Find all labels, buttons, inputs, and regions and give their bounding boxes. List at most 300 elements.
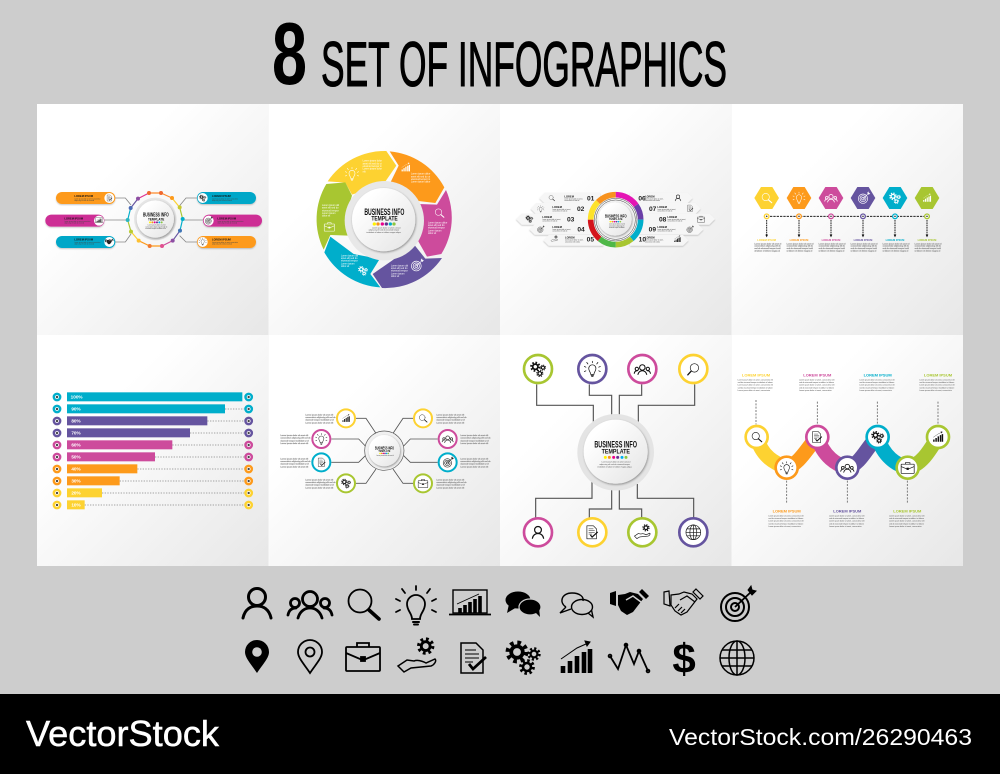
node briefcase: consectetur adipiscing elit sed do	[436, 481, 467, 484]
segment icons and text: eiusmod tempor	[428, 227, 445, 230]
footer logo: VectorStock	[26, 713, 220, 754]
left row 03: Lorem ipsum dolor sit amet,	[542, 218, 561, 221]
label top 1: Lorem ipsum dolor sit amet, consectetur elit	[738, 384, 774, 387]
step 3: Lorem ipsum dolor sit amet el	[819, 242, 846, 245]
step 4: ut labore et dolore magna al	[851, 249, 877, 252]
left row 04: LOREM	[552, 225, 563, 229]
left row 01: consectetur elit sed do	[564, 199, 579, 202]
label top 3: sed do eiusmod tempor incididunt ut labore	[859, 381, 894, 384]
icon: growth bars	[561, 641, 590, 673]
right row 08: Lorem ipsum dolor sit amet,	[667, 218, 686, 221]
bar 30%	[67, 476, 120, 485]
teal pill bottom left: adipiscing elit sed do eiusmod	[74, 243, 94, 246]
node search: eiusmod tempor incididunt ut el	[436, 419, 465, 422]
right row 10: LOREM	[645, 236, 655, 240]
node group	[628, 355, 656, 383]
left row 03: consectetur elit sed do	[542, 220, 557, 223]
node gears: eiusmod tempor incididunt ut el	[305, 484, 334, 487]
node search	[679, 355, 707, 383]
orange pill top left: adipiscing elit sed do eiusmod	[74, 199, 94, 202]
segment icons and text: Lorem ipsum dolor	[363, 160, 382, 163]
label bottom 3: Lorem ipsum dolor sit amet, consectetur	[889, 525, 922, 528]
orange pill bottom right: Lorem ipsum dolor sit amet consectetur	[212, 241, 238, 244]
right row 10: 10	[639, 237, 646, 244]
label top 4: LOREM IPSUM	[924, 373, 953, 378]
connectors	[536, 384, 695, 518]
label top 2	[799, 373, 835, 392]
icon: briefcase	[346, 643, 380, 671]
segment icons and text: dolor sit	[341, 265, 350, 268]
label bottom 1: Lorem ipsum dolor sit amet, consectetur elit	[768, 520, 804, 523]
node bulb: Lorem ipsum dolor sit amet elit	[280, 434, 309, 437]
right row 08: consectetur elit sed do	[667, 220, 682, 223]
bar 90%: 90%	[71, 407, 82, 412]
step 2: consectetur adipiscing elit do	[787, 245, 814, 248]
multicolour ring	[590, 194, 641, 245]
left row 04: Lorem ipsum dolor sit amet,	[552, 228, 571, 231]
left row 04: consectetur elit sed do	[552, 230, 567, 233]
right row 06: Lorem ipsum dolor sit amet,	[645, 197, 664, 200]
label bottom 3: Lorem ipsum dolor sit amet, consectetur elit	[889, 520, 925, 523]
node briefcase: Lorem ipsum dolor sit amet elit	[436, 486, 465, 489]
step 4: consectetur adipiscing elit do	[851, 245, 878, 248]
center disc: BUSINESS INFO	[605, 213, 627, 219]
right row 10	[630, 235, 688, 246]
label top 4: sed do eiusmod tempor incididunt ut labore	[919, 381, 954, 384]
panel background	[37, 104, 268, 335]
label bottom 1: Lorem ipsum dolor sit amet, consectetur	[768, 525, 801, 528]
label top 4: Lorem ipsum dolor sit amet, consectetur elit	[919, 378, 955, 381]
magenta pill left: adipiscing elit sed do eiusmod	[64, 222, 84, 225]
center disc: eiusmod tempor incididunt ut la	[145, 227, 166, 230]
label top 4: Lorem ipsum dolor sit amet, consectetur	[919, 389, 952, 392]
left row 05	[543, 235, 603, 246]
icon: solid handshake	[610, 589, 649, 615]
label bottom 3: Lorem ipsum dolor sit amet, consectetur elit	[889, 514, 925, 517]
left row 05: Lorem ipsum dolor sit amet,	[565, 239, 584, 242]
node target: Lorem ipsum dolor sit amet elit	[460, 465, 489, 468]
panel: percentage bar chart	[37, 335, 268, 566]
center disc: adipiscing elit sed do eiusmod tempor	[369, 229, 400, 232]
hub: adipiscing elit sed do eiusmod tempor	[599, 463, 630, 466]
segment icons and text: Lorem ipsum dol	[341, 254, 359, 257]
node briefcase	[414, 474, 467, 492]
step 1: Lorem ipsum dolor sit amet el	[754, 242, 782, 245]
left row 04: 04	[577, 227, 585, 234]
icon: hand with gear	[398, 639, 436, 672]
icon: light bulb	[396, 586, 436, 624]
node hand with gear	[628, 518, 656, 546]
node document: Lorem ipsum dolor sit amet elit	[280, 457, 309, 460]
left row 05: 05	[587, 237, 594, 244]
node search: Lorem ipsum dolor sit amet elit	[436, 413, 465, 416]
icon: user	[243, 588, 271, 618]
step 5: LOREM IPSUM	[886, 238, 905, 242]
node group: eiusmod tempor incididunt ut el	[460, 439, 489, 442]
step 2: LOREM IPSUM	[790, 238, 809, 242]
segment icons and text: Lorem ipsum	[322, 212, 336, 215]
center disc: consectetur adipiscing elit	[609, 224, 625, 227]
left row 01: 01	[587, 196, 595, 203]
step 2	[787, 187, 814, 252]
right row 06	[630, 193, 693, 203]
label bottom 1: Lorem ipsum dolor sit amet, consectetur elit	[768, 514, 804, 517]
timeline dashed line	[767, 215, 927, 218]
magenta pill right	[203, 215, 262, 227]
label top 3: Lorem ipsum dolor sit amet, consectetur elit	[859, 378, 895, 381]
left row 01: Lorem ipsum dolor sit amet,	[564, 197, 583, 200]
hub: Lorem ipsum dolor sit amet el	[376, 454, 394, 457]
node search	[414, 409, 467, 427]
bar 10%: 10%	[71, 503, 82, 508]
step 6: consectetur adipiscing elit do	[915, 245, 942, 248]
bar 40%: 40%	[71, 467, 82, 472]
step 6: LOREM IPSUM	[918, 238, 937, 242]
right row 09: 09	[649, 227, 656, 234]
label bottom 3: sed do eiusmod tempor incididunt ut labore	[889, 517, 924, 520]
magenta pill left: Lorem ipsum dolor sit amet consectetur	[64, 220, 91, 223]
node gears	[524, 355, 552, 383]
segment icons and text: dolor sit	[322, 215, 331, 218]
label top 2: Lorem ipsum dolor sit amet, consectetur	[799, 389, 832, 392]
segment icons and text: Lorem ipsum	[391, 272, 405, 275]
label bottom 3	[889, 509, 925, 528]
center disc: TEMPLATE	[609, 217, 623, 221]
panel background	[500, 104, 731, 335]
node bulb: consectetur adipiscing elit sed do	[280, 437, 311, 440]
bar 60%: 60%	[71, 443, 82, 448]
node chart: Lorem ipsum dolor sit amet elit	[305, 421, 334, 424]
node target: eiusmod tempor incididunt ut el	[460, 463, 489, 466]
panel background	[731, 335, 963, 566]
orange pill bottom right: adipiscing elit sed do eiusmod	[212, 243, 232, 246]
step 3: ut labore et dolore magna al	[819, 249, 845, 252]
icon: globe	[720, 641, 754, 675]
bar 90%	[67, 404, 225, 413]
panel: ten step hexagon ring	[500, 104, 731, 335]
node search	[746, 426, 768, 448]
node document: eiusmod tempor incididunt ut el	[280, 463, 309, 466]
icon: target	[721, 586, 756, 621]
panel background	[500, 335, 731, 566]
icon: solid chat	[506, 592, 541, 617]
step 6: sed do eiusmod tempor incid	[915, 247, 941, 250]
hub: BUSINESS INFO	[594, 440, 637, 450]
right row 06: consectetur elit sed do	[645, 199, 660, 202]
node user	[524, 518, 552, 546]
step 1: consectetur adipiscing elit do	[754, 245, 781, 248]
node target	[439, 453, 491, 471]
label top 1: Lorem ipsum dolor sit amet, consectetur	[738, 389, 771, 392]
label bottom 2: Lorem ipsum dolor sit amet, consectetur	[829, 525, 862, 528]
bar 70%: 70%	[71, 431, 82, 436]
node document: consectetur adipiscing elit sed do	[280, 460, 311, 463]
panel: hexagon timeline	[731, 104, 963, 335]
orange pill top left	[56, 192, 115, 204]
node chart: Lorem ipsum dolor sit amet elit	[305, 413, 334, 416]
label bottom 2: LOREM IPSUM	[833, 509, 862, 514]
step 4: Lorem ipsum dolor sit amet el	[851, 242, 878, 245]
left row 01	[539, 193, 600, 203]
node target: Lorem ipsum dolor sit amet elit	[460, 457, 489, 460]
right row 08: LOREM	[667, 215, 678, 219]
label top 2: Lorem ipsum dolor sit amet, consectetur elit	[799, 378, 835, 381]
step 2: sed do eiusmod tempor incid	[787, 247, 813, 250]
node search: consectetur adipiscing elit sed do	[436, 416, 467, 419]
node search: Lorem ipsum dolor sit amet elit	[436, 421, 465, 424]
label bottom 2: Lorem ipsum dolor sit amet, consectetur elit	[829, 520, 865, 523]
node bulb	[280, 430, 330, 448]
icon: document check	[461, 643, 486, 673]
node gears: consectetur adipiscing elit sed do	[305, 481, 336, 484]
right row 09: LOREM	[657, 225, 668, 229]
teal pill bottom left: Lorem ipsum dolor sit amet consectetur	[74, 241, 101, 244]
step 2: ut labore et dolore magna al	[787, 249, 813, 252]
step 1: ut labore et dolore magna al	[754, 249, 780, 252]
label top 2: sed do eiusmod tempor incididunt ut labore	[799, 381, 834, 384]
label top 2: sed do eiusmod tempor incididunt ut labore	[799, 386, 834, 389]
panel: wave timeline	[731, 335, 963, 566]
panel background	[268, 335, 500, 566]
segment icons and text: Lorem ipsum dol	[322, 204, 340, 207]
label top 4: Lorem ipsum dolor sit amet, consectetur elit	[919, 384, 955, 387]
segment icons and text	[322, 160, 448, 278]
magenta pill left	[45, 215, 104, 227]
panel background	[731, 104, 963, 335]
right row 06: LOREM	[645, 194, 655, 198]
panel: circular timeline with pills	[37, 104, 268, 335]
bar 20%: 20%	[71, 491, 82, 496]
right row 09: consectetur elit sed do	[657, 230, 672, 233]
label bottom 1: LOREM IPSUM	[773, 509, 801, 514]
icon: solid pin	[245, 640, 269, 673]
connectors	[331, 418, 438, 483]
label top 2: Lorem ipsum dolor sit amet, consectetur elit	[799, 384, 835, 387]
teal pill top right: adipiscing elit sed do eiusmod	[212, 199, 232, 202]
node group: consectetur adipiscing elit sed do	[460, 437, 491, 440]
icon: outline pin	[298, 640, 322, 673]
segment icons and text: Lorem ipsum dolor	[428, 221, 448, 224]
center disc: incididunt ut labore et dolore magna aliqua	[366, 231, 402, 234]
center disc: TEMPLATE	[371, 217, 398, 223]
right row 07: consectetur elit sed do	[657, 210, 672, 213]
segment icons and text: eiusmod tempor in	[363, 165, 383, 168]
node document	[280, 453, 330, 471]
step 3	[819, 187, 846, 252]
step 6: ut labore et dolore magna al	[915, 249, 941, 252]
icon: dollar: $	[672, 635, 696, 682]
bar 100%: 100%	[71, 395, 83, 400]
step 3: LOREM IPSUM	[822, 238, 841, 242]
segment icons and text: amet elit sed do	[341, 257, 358, 260]
node globe	[679, 518, 707, 546]
label bottom 1: sed do eiusmod tempor incididunt ut labore	[768, 517, 803, 520]
magenta pill right: Lorem ipsum dolor sit amet consectetur	[217, 220, 244, 223]
icon: search	[348, 590, 379, 619]
step 1: LOREM IPSUM	[757, 238, 777, 242]
magenta pill left: LOREM IPSUM	[64, 217, 84, 221]
label bottom 1: sed do eiusmod tempor incididunt ut labore	[768, 522, 803, 525]
right row 06: 06	[638, 196, 646, 203]
center disc	[594, 198, 637, 241]
label bottom 2: sed do eiusmod tempor incididunt ut labore	[829, 517, 864, 520]
segment icons and text: dolor sit	[391, 275, 400, 278]
hub: BUSINESS INFO	[375, 446, 394, 451]
node document: Lorem ipsum dolor sit amet elit	[280, 465, 309, 468]
center disc: Lorem ipsum dolor sit amet	[148, 224, 166, 227]
teal pill bottom left: LOREM IPSUM	[74, 238, 94, 242]
step 4	[851, 187, 878, 252]
center disc: Lorem ipsum dolor sit amet	[609, 223, 626, 226]
icon: outline handshake	[664, 589, 703, 615]
left row 04	[529, 224, 597, 235]
label bottom 2: sed do eiusmod tempor incididunt ut labore	[829, 522, 864, 525]
segment icons and text: eiusmod tempor	[322, 209, 339, 212]
label bottom 3: sed do eiusmod tempor incididunt ut labore	[889, 522, 924, 525]
left row 03	[516, 214, 593, 225]
magenta pill right: LOREM IPSUM	[217, 217, 237, 221]
hub: TEMPLATE	[378, 450, 391, 453]
left row 02: LOREM	[552, 205, 563, 209]
step 4: LOREM IPSUM	[854, 238, 873, 242]
step 5: sed do eiusmod tempor incid	[883, 247, 909, 250]
magenta pill right: adipiscing elit sed do eiusmod	[217, 222, 237, 225]
teal pill top right: LOREM IPSUM	[212, 194, 232, 198]
node briefcase	[897, 457, 919, 479]
node group: Lorem ipsum dolor sit amet elit	[460, 442, 489, 445]
segment icons and text: Lorem ipsum dolor	[411, 173, 431, 176]
teal pill bottom left	[56, 236, 115, 248]
label top 2: LOREM IPSUM	[803, 373, 832, 378]
footer bar	[0, 694, 1000, 774]
orange pill bottom right	[197, 236, 256, 248]
node gears	[305, 474, 355, 492]
label bottom 2	[829, 509, 865, 528]
node gears: Lorem ipsum dolor sit amet elit	[305, 486, 334, 489]
segment icons and text: eiusmod tempor	[341, 260, 358, 263]
step 6	[915, 187, 942, 252]
bar 10%	[67, 500, 85, 509]
dotted guides	[85, 409, 244, 505]
icon: zigzag line	[609, 644, 649, 672]
segment icons and text: eiusmod tempor	[391, 270, 408, 273]
icon: outline chat	[560, 593, 593, 617]
segment green	[317, 182, 352, 250]
node chart	[927, 426, 949, 448]
left row 03: LOREM	[542, 215, 553, 219]
bar 40%	[67, 464, 137, 473]
dashed leaders	[756, 400, 938, 503]
panel background	[37, 335, 268, 566]
segment orange	[390, 151, 444, 203]
node briefcase: eiusmod tempor incididunt ut el	[436, 484, 465, 487]
node bulb: Lorem ipsum dolor sit amet elit	[280, 442, 309, 445]
segment icons and text: Lorem ipsum dol	[391, 264, 409, 267]
bar 50%	[67, 452, 155, 461]
right row 07	[637, 203, 701, 214]
title numeral: 8	[272, 4, 307, 103]
right row 09	[637, 224, 703, 235]
right row 10: Lorem ipsum dolor sit amet,	[645, 239, 664, 242]
segment magenta	[417, 190, 452, 257]
label bottom 3: LOREM IPSUM	[893, 509, 922, 514]
hub: TEMPLATE	[602, 450, 630, 456]
step 2: Lorem ipsum dolor sit amet el	[787, 242, 814, 245]
left row 02: Lorem ipsum dolor sit amet,	[552, 208, 571, 211]
right row 08	[638, 214, 715, 225]
segment teal	[324, 237, 380, 287]
node document	[578, 518, 606, 546]
segment icons and text: amet elit sed do	[428, 224, 445, 227]
left row 02: 02	[577, 206, 585, 213]
center disc	[345, 181, 424, 260]
label bottom 1	[768, 509, 804, 528]
wave band	[757, 437, 938, 468]
node gears	[867, 426, 889, 448]
segment yellow	[328, 151, 396, 195]
node briefcase: Lorem ipsum dolor sit amet elit	[436, 478, 465, 481]
node chart	[305, 409, 355, 427]
segment icons and text: amet elit sed do	[391, 267, 408, 270]
node chart: eiusmod tempor incididunt ut el	[305, 419, 334, 422]
step 3: consectetur adipiscing elit do	[819, 245, 846, 248]
center disc: BUSINESS INFO	[143, 213, 169, 219]
teal pill top right: Lorem ipsum dolor sit amet consectetur	[212, 197, 238, 200]
node gears: Lorem ipsum dolor sit amet elit	[305, 478, 334, 481]
node document	[806, 426, 828, 448]
center disc	[134, 198, 177, 240]
step 5: Lorem ipsum dolor sit amet el	[883, 242, 910, 245]
icon: gears	[508, 643, 539, 673]
hub: incididunt ut labore et dolore magna aliqua	[597, 466, 633, 469]
label top 4	[919, 373, 955, 392]
step 5: consectetur adipiscing elit do	[883, 245, 910, 248]
bar 30%: 30%	[71, 479, 82, 484]
label top 3	[859, 373, 895, 392]
label top 3: Lorem ipsum dolor sit amet, consectetur	[859, 389, 892, 392]
segment icons and text: Lorem ipsum	[428, 229, 442, 232]
right row 08: 08	[659, 216, 667, 223]
step 1	[754, 187, 782, 252]
right row 09: Lorem ipsum dolor sit amet,	[657, 228, 676, 231]
bar 20%	[67, 488, 102, 497]
footer url: VectorStock.com/26290463	[669, 724, 972, 750]
label bottom 2: Lorem ipsum dolor sit amet, consectetur elit	[829, 514, 865, 517]
icon set	[243, 586, 756, 682]
segmented dotted ring	[126, 191, 185, 248]
orange pill top left: Lorem ipsum dolor sit amet consectetur	[74, 197, 101, 200]
step 4: sed do eiusmod tempor incid	[851, 247, 877, 250]
title	[272, 4, 727, 103]
left row 02: consectetur elit sed do	[552, 210, 567, 213]
bullet markers	[54, 394, 252, 508]
segment icons and text: Lorem ipsum dolor	[363, 168, 382, 171]
label top 1: Lorem ipsum dolor sit amet, consectetur elit	[738, 378, 774, 381]
bar 60%	[67, 440, 172, 449]
panel background	[268, 104, 500, 335]
label top 1: LOREM IPSUM	[742, 373, 771, 378]
bar 70%	[67, 428, 190, 437]
node bulb: eiusmod tempor incididunt ut el	[280, 439, 309, 442]
left row 02	[531, 203, 597, 214]
node group	[439, 430, 491, 448]
orange pill bottom right: LOREM IPSUM	[212, 238, 232, 242]
node target: consectetur adipiscing elit sed do	[460, 460, 491, 463]
label top 3: sed do eiusmod tempor incididunt ut labore	[859, 386, 894, 389]
bar 50%: 50%	[71, 455, 82, 460]
node bulb	[578, 355, 606, 383]
label top 3: Lorem ipsum dolor sit amet, consectetur elit	[859, 384, 895, 387]
